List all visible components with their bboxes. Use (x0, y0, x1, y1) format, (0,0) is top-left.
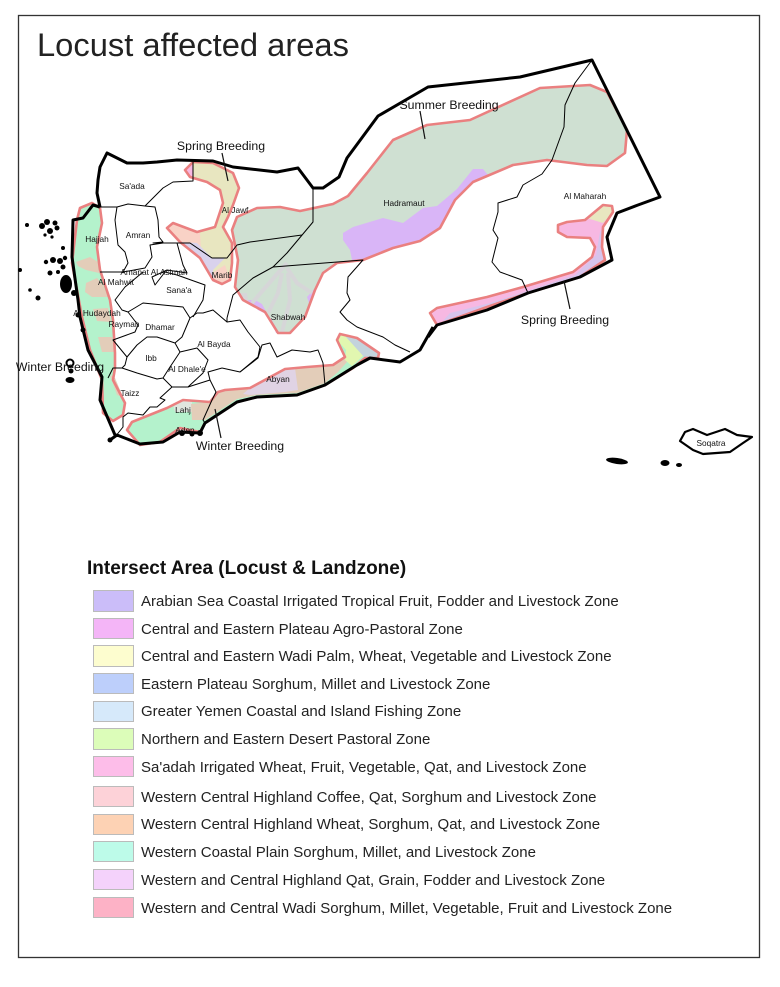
province labels: Dhamar (145, 322, 175, 332)
legend item: Sa'adah: Sa'adah Irrigated Wheat, Fruit, Vegetable, Qat, and Livestock Zone (141, 759, 587, 776)
province labels: Aden (175, 425, 195, 435)
province labels: Taizz (121, 388, 139, 398)
legend item: Northern and Eastern Desert (94, 728, 430, 750)
province labels: Al Maharah (564, 191, 607, 201)
province labels: Ibb (145, 353, 157, 363)
legend item: Western and Central Highland: Western and Central Highland Qat, Grain, Fodder and Livestock Zone (141, 872, 605, 889)
province labels: Soqatra (696, 438, 726, 448)
province labels (73, 181, 726, 448)
province labels: Lahj (175, 405, 191, 415)
province labels: Raymah (109, 319, 140, 329)
legend item: Greater Yemen: Greater Yemen Coastal and Island Fishing Zone (141, 703, 461, 720)
legend heading: Intersect Area (Locust & Landzone) (87, 558, 406, 579)
legend item: Eastern Plateau: Eastern Plateau Sorghum, Millet and Livestock Zone (141, 676, 490, 693)
islands (18, 219, 682, 467)
locust zone: summer breeding (232, 85, 627, 333)
province labels: Marib (212, 270, 233, 280)
legend (87, 558, 672, 918)
legend item: Western Coastal Plain: Western Coastal Plain Sorghum, Millet, and Livestock Zone (141, 844, 536, 861)
legend item: Central and Eastern Wadi: Central and Eastern Wadi Palm, Wheat, Vegetable and Livestock Zone (141, 648, 612, 665)
callout labels: Spring Breeding (521, 313, 609, 327)
province labels: Hadramaut (383, 198, 425, 208)
province labels: Al Mahwit (98, 277, 135, 287)
legend item: Western Central Wheat: Western Central Highland Wheat, Sorghum, Qat, and Livestock Zone (141, 816, 600, 833)
province labels: Al Jawf (222, 205, 249, 215)
province labels: Al Hudaydah (73, 308, 121, 318)
legend item: Central and Eastern Plateau: Central and Eastern Plateau Agro-Pastoral Zone (141, 621, 463, 638)
legend item: Western Central Coffee: Western Central Highland Coffee, Qat, Sorghum and Livestock Zone (141, 789, 597, 806)
locust zone: north-west spring breeding (167, 162, 239, 284)
province labels: Al Bayda (197, 339, 231, 349)
callout labels: Winter Breeding (196, 439, 284, 453)
province labels: Shabwah (271, 312, 306, 322)
map of Yemen (16, 60, 752, 467)
province labels: Sana'a (166, 285, 192, 295)
country outline (72, 60, 660, 444)
locust zone: east coast spring breeding (430, 205, 613, 325)
callout labels: Summer Breeding (399, 98, 499, 112)
province labels: Amanat Al Asimah (120, 267, 188, 277)
callout labels: Spring Breeding (177, 139, 265, 153)
legend item: Northern and Eastern Desert: Northern and Eastern Desert Pastoral Zone (141, 731, 430, 748)
locust zone: west coast winter breeding (72, 203, 125, 421)
province labels: Hajjah (85, 234, 109, 244)
legend item: Arabian Sea: Arabian Sea Coastal Irrigated Tropical Fruit, Fodder and Livestock Zone (141, 593, 619, 610)
province labels: Abyan (266, 374, 290, 384)
province labels: Al Dhale'e (168, 364, 206, 374)
legend item: Western and Central Wadi: Western and Central Wadi Sorghum, Millet, Vegetable, Fruit and Livestock Zone (141, 900, 672, 917)
province boundaries (100, 60, 592, 437)
callout leader lines (215, 111, 570, 438)
title: Locust affected areas (37, 26, 349, 63)
province labels: Amran (126, 230, 151, 240)
province labels: Sa'ada (119, 181, 145, 191)
locust zone: south coast winter breeding (127, 334, 379, 445)
island: Soqatra (680, 429, 752, 454)
callout labels (16, 98, 609, 453)
callout labels: Winter Breeding (16, 360, 104, 374)
